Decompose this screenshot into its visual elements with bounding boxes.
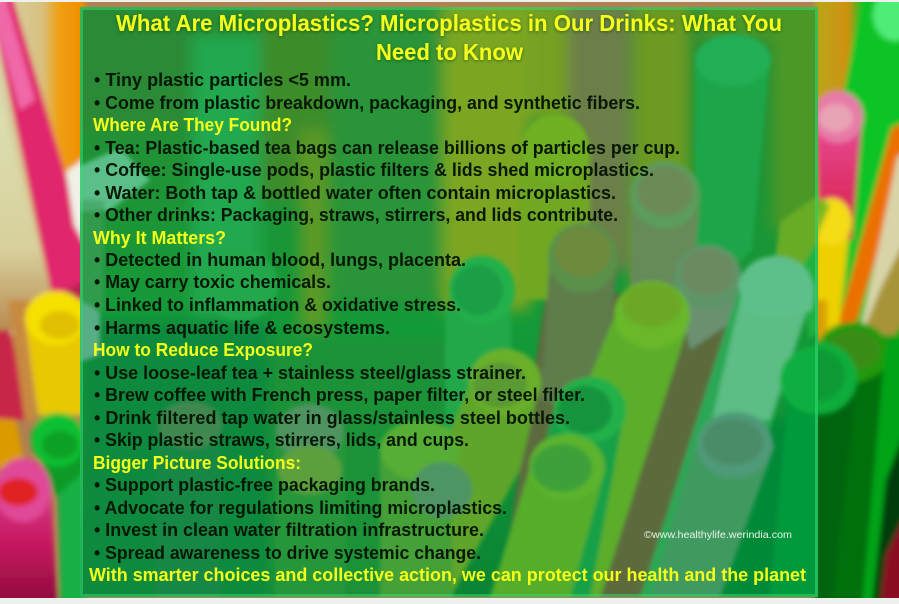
section: what are microplastics: • Tiny plastic particles <5 mm. bbox=[94, 70, 351, 90]
magenta straw bbox=[0, 480, 58, 604]
panel border bbox=[82, 8, 816, 596]
pale straw end at left bbox=[66, 148, 150, 212]
section: how to reduce exposure: • Use loose-leaf tea + stainless steel/glass strainer. bbox=[94, 363, 526, 383]
section: where are they found: • Tea: Plastic-based tea bags can release billions of particles per cup. bbox=[94, 138, 680, 158]
section: why it matters: • Harms aquatic life & ecosystems. bbox=[94, 318, 390, 338]
yellow straw bbox=[24, 320, 80, 422]
right lower wall bbox=[815, 335, 899, 604]
section: bigger picture solutions: • Invest in clean water filtration infrastructure. bbox=[94, 520, 484, 540]
closing statement: With smarter choices and collective action, we can protect our health and the planet bbox=[89, 565, 806, 585]
section: how to reduce exposure: • Drink filtered tap water in glass/stainless steel bottles. bbox=[94, 408, 570, 428]
right upper wall bbox=[815, 0, 899, 340]
section: how to reduce exposure: • Brew coffee with French press, paper filter, or steel filter. bbox=[94, 385, 585, 405]
white straw tip bbox=[66, 158, 85, 245]
section: where are they found bbox=[93, 115, 680, 225]
pink straw bbox=[815, 105, 862, 240]
section: where are they found: Where Are They Found? bbox=[93, 115, 292, 135]
section: how to reduce exposure: How to Reduce Exposure? bbox=[93, 340, 313, 360]
bright green tall straw bbox=[692, 66, 771, 262]
section: where are they found: • Coffee: Single-use pods, plastic filters & lids shed microplastics. bbox=[94, 160, 654, 180]
watermark credit: ©www.healthylife.werindia.com bbox=[644, 529, 792, 541]
title: Need to Know bbox=[376, 39, 523, 65]
green straw bbox=[40, 448, 80, 499]
orange and cream stripes bbox=[838, 122, 899, 335]
section: bigger picture solutions bbox=[93, 453, 507, 563]
section: bigger picture solutions: • Advocate for regulations limiting microplastics. bbox=[94, 498, 507, 518]
section: why it matters: • May carry toxic chemicals. bbox=[94, 272, 331, 292]
section: where are they found: • Other drinks: Packaging, straws, stirrers, and lids contribute. bbox=[94, 205, 618, 225]
section: what are microplastics bbox=[94, 70, 640, 113]
section: how to reduce exposure: • Skip plastic straws, stirrers, lids, and cups. bbox=[94, 430, 469, 450]
lower middle straws bbox=[588, 318, 688, 597]
section: what are microplastics: • Come from plastic breakdown, packaging, and synthetic fibers. bbox=[94, 93, 640, 113]
section: bigger picture solutions: • Spread awareness to drive systemic change. bbox=[94, 543, 481, 563]
section: why it matters: • Linked to inflammation & oxidative stress. bbox=[94, 295, 461, 315]
second green straw bbox=[58, 470, 85, 604]
section: bigger picture solutions: • Support plastic-free packaging brands. bbox=[94, 475, 435, 495]
lower left muted straws bbox=[155, 430, 220, 600]
left lower wall bbox=[0, 330, 30, 420]
gray-brown gap bbox=[500, 280, 760, 598]
section: why it matters: • Detected in human blood, lungs, placenta. bbox=[94, 250, 466, 270]
section: bigger picture solutions: Bigger Picture Solutions: bbox=[93, 453, 301, 473]
section: why it matters: Why It Matters? bbox=[93, 228, 226, 248]
yellow straw right bbox=[818, 236, 854, 334]
section: how to reduce exposure bbox=[93, 340, 585, 450]
upper middle straws bbox=[520, 150, 590, 300]
small orange straw bbox=[0, 418, 24, 470]
left upper wall bbox=[0, 0, 85, 335]
title bbox=[116, 10, 782, 65]
section: why it matters bbox=[93, 228, 466, 338]
section: where are they found: • Water: Both tap & bottled water often contain microplastics. bbox=[94, 183, 616, 203]
title: What Are Microplastics? Microplastics in Our Drinks: What You bbox=[116, 10, 782, 36]
